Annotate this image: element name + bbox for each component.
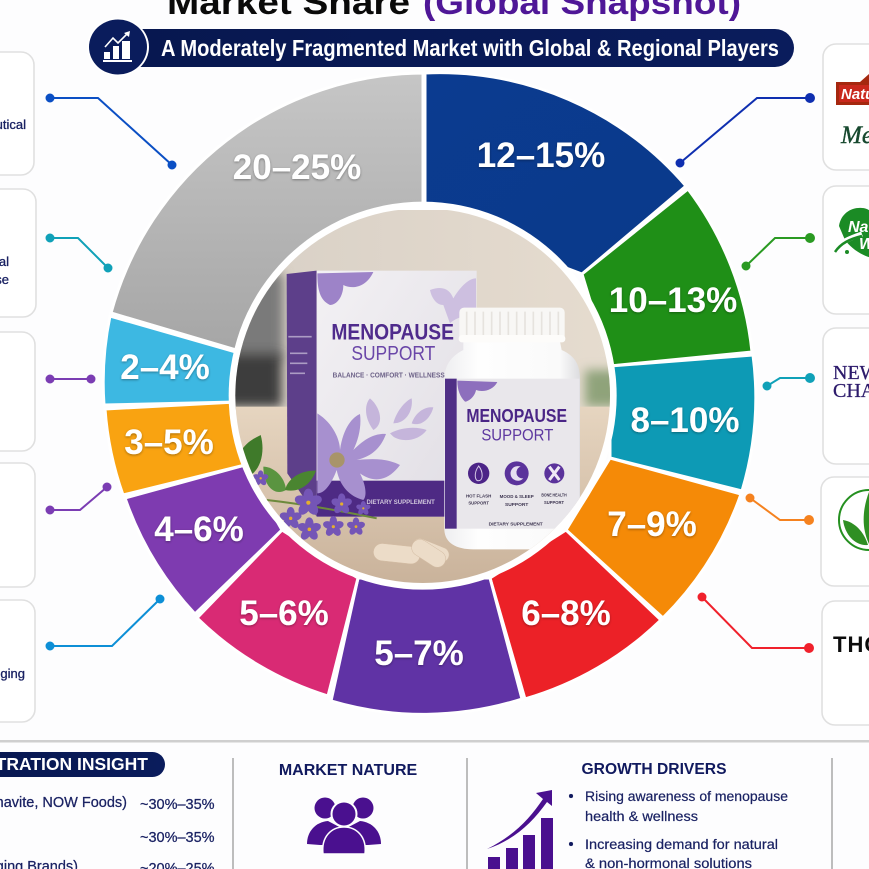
icon: rising bar chart badge: [87, 18, 149, 76]
segment: purple 5–7%: 5–7%: [374, 634, 464, 673]
product photo: [210, 202, 622, 590]
bottle: SUPPORT: [481, 426, 553, 445]
connector: right 5: [698, 594, 813, 652]
left card labels: ging: [0, 666, 25, 681]
segment: violet 4–6%: 4–6%: [154, 510, 244, 549]
product box: MENOPAUSE: [331, 319, 454, 344]
icon: growth bars with arrow: [487, 790, 553, 869]
segment: blue 12–15%: 12–15%: [477, 136, 605, 175]
connector: left 1: [46, 94, 176, 168]
connector: right 2: [742, 234, 814, 270]
segment: orange 7–9%: 7–9%: [607, 505, 697, 544]
bullet list: Rising awareness of menopause: [585, 789, 788, 804]
bullet list: [569, 789, 788, 869]
flowers and leaves: [242, 435, 377, 542]
segment: grey 20–25%: 20–25%: [233, 148, 361, 187]
left card labels: [0, 117, 26, 681]
divider: [0, 740, 869, 742]
photo background: [210, 210, 622, 587]
product box: [287, 271, 477, 517]
capsules: [374, 538, 449, 568]
panel: left company cards: [0, 52, 36, 722]
segment: green 10–13%: [582, 189, 752, 366]
segment: orange 7–9%: [566, 458, 741, 618]
connector: left 3: [46, 376, 94, 382]
product box: DIETARY SUPPLEMENT: [366, 499, 435, 506]
bottle: BONE HEALTH: [541, 493, 567, 499]
bullet list: Increasing demand for natural: [585, 837, 778, 852]
connector: left 4: [46, 484, 110, 514]
segment: red 6–8%: [490, 530, 661, 699]
bottle: MENOPAUSE: [466, 405, 567, 426]
table rows: ~30%–35%: [140, 830, 215, 846]
segment: amber 3–5%: 3–5%: [124, 423, 214, 462]
connector: right 1: [676, 94, 814, 166]
bottle: SUPPORT: [505, 502, 528, 508]
product box: SUPPORT: [351, 343, 435, 365]
segment: blue 12–15%: [425, 73, 686, 274]
icon: people group: [307, 798, 381, 854]
segment: pink 5–6%: 5–6%: [239, 594, 329, 633]
segment: pink 5–6%: [197, 530, 358, 696]
logo: New Chapter: [833, 362, 869, 402]
connector: right 3: [764, 374, 814, 390]
connector: right 4: [746, 494, 813, 524]
bullet list: health & wellness: [585, 809, 698, 824]
subtitle banner: A Moderately Fragmented Market with Global & Regional Players: [161, 35, 779, 61]
panel: right company cards: [821, 44, 869, 725]
segment: sky 2–4%: 2–4%: [120, 348, 210, 387]
bottle: DIETARY SUPPLEMENT: [489, 521, 543, 527]
segment: violet 4–6%: [125, 465, 282, 614]
segment: grey 20–25%: [111, 73, 423, 350]
panel: concentration insight: [0, 752, 215, 869]
connector: left 5: [46, 596, 164, 650]
segment: teal 8–10%: [610, 355, 756, 491]
bottle: SUPPORT: [468, 501, 489, 507]
table rows: [0, 795, 215, 869]
panel: market nature: MARKET NATURE: [279, 762, 418, 779]
product box: BALANCE · COMFORT · WELLNESS: [333, 370, 445, 379]
connector: left 2: [46, 234, 112, 272]
segment: teal 8–10%: 8–10%: [631, 401, 739, 440]
segment: amber 3–5%: [105, 402, 245, 495]
segment: green 10–13%: 10–13%: [609, 281, 737, 320]
segment: sky 2–4%: [103, 316, 236, 405]
segment: red 6–8%: 6–8%: [521, 594, 611, 633]
bottle: MOOD & SLEEP: [500, 494, 534, 500]
connectors: [46, 94, 814, 652]
logo: Nature's Bounty and Mega: [836, 74, 869, 149]
panel: growth drivers: GROWTH DRIVERS: [582, 761, 726, 778]
vertical dividers: [232, 758, 833, 869]
logo: Herbalife leaf: [839, 490, 869, 550]
logo: Nature's Way: [834, 208, 869, 258]
donut chart: [103, 73, 756, 714]
bottle: HOT FLASH: [466, 493, 492, 499]
panel: market nature: [279, 762, 418, 854]
segment: purple 5–7%: [331, 578, 522, 714]
table rows: ~30%–35%: [140, 797, 215, 813]
panel: growth drivers: [487, 761, 788, 869]
title: [167, 0, 741, 22]
bottle: SUPPORT: [544, 500, 564, 506]
subtitle banner: [87, 18, 794, 76]
bottle: [444, 308, 580, 549]
